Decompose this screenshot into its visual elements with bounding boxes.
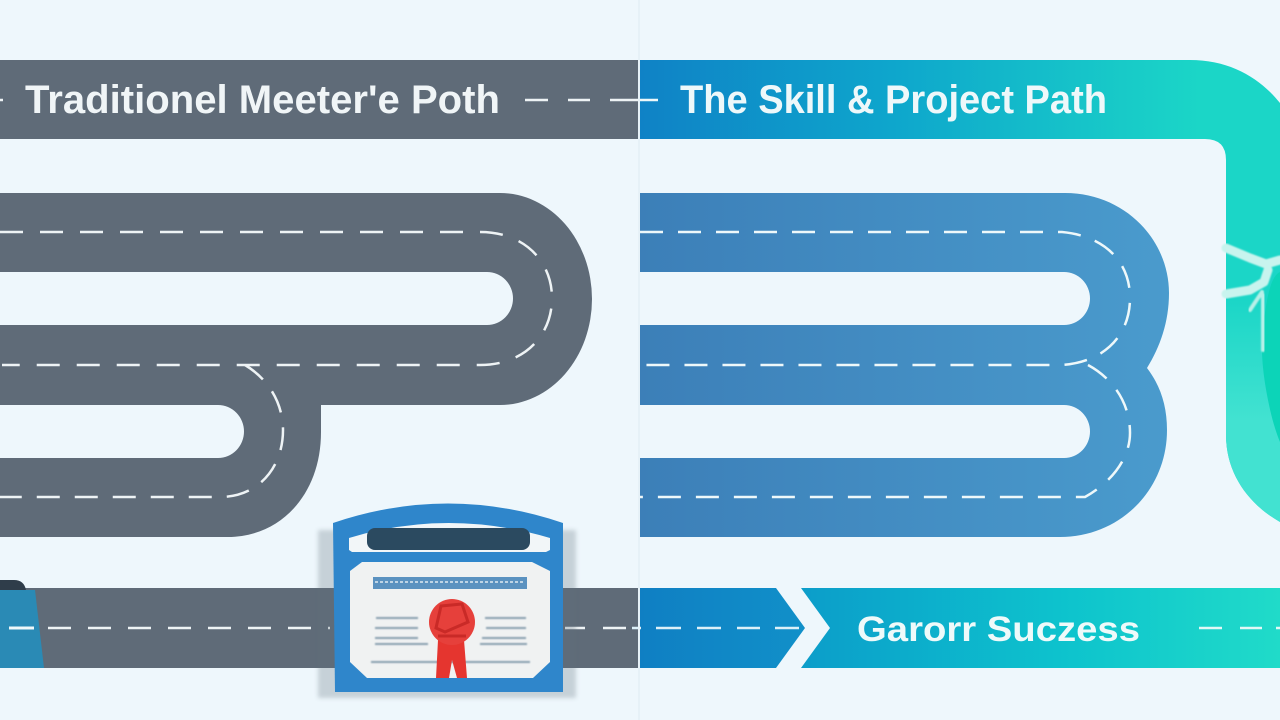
heading: traditional path: Traditionel Meeter'e Poth: [25, 78, 500, 122]
label: career success: Garorr Suczess: [857, 610, 1140, 649]
heading: skill and project path: The Skill & Project Path: [680, 78, 1107, 122]
panel: traditional path header: [0, 60, 638, 139]
panel: skill and project path header with right band: [640, 60, 1280, 522]
panel: bottom gray road: [0, 588, 638, 668]
chart: gray winding road: [0, 193, 592, 537]
divider between paths: [638, 0, 640, 720]
chart: blue winding road: [640, 193, 1169, 537]
icon: certificate: [318, 504, 576, 698]
icon: cracked teal band detail: [1226, 248, 1280, 442]
icon: vehicle at road start: [0, 580, 44, 668]
panel: career success banner: [801, 588, 1280, 668]
arrow: blue road into career success: [632, 588, 805, 668]
icon: red ribbon seal: [429, 599, 475, 678]
